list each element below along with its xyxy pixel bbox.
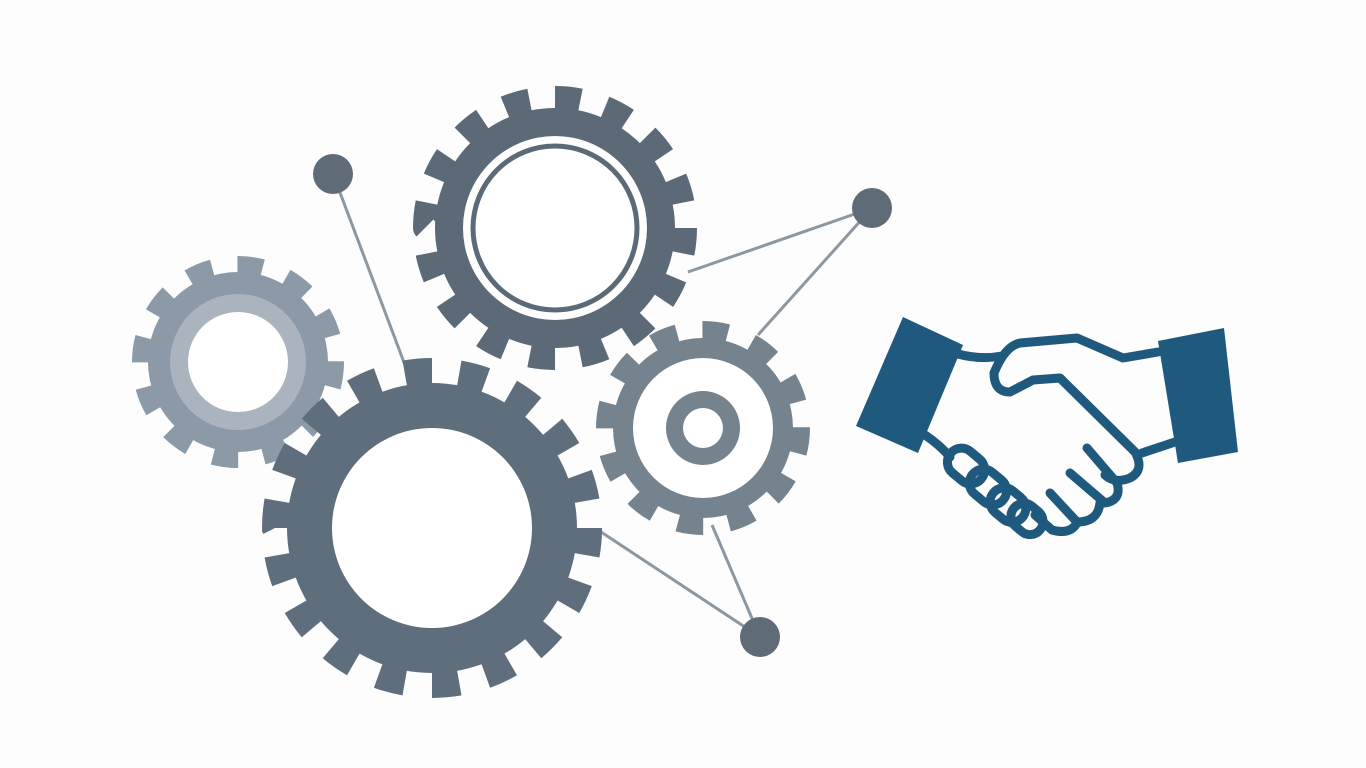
- gear: big: [275, 371, 589, 685]
- node dots: [313, 154, 892, 657]
- gear: left light: [141, 265, 335, 459]
- connector lines: [333, 174, 872, 637]
- gear: right: [605, 330, 801, 526]
- icon: handshake: [856, 317, 1238, 540]
- gear: top: [425, 98, 685, 358]
